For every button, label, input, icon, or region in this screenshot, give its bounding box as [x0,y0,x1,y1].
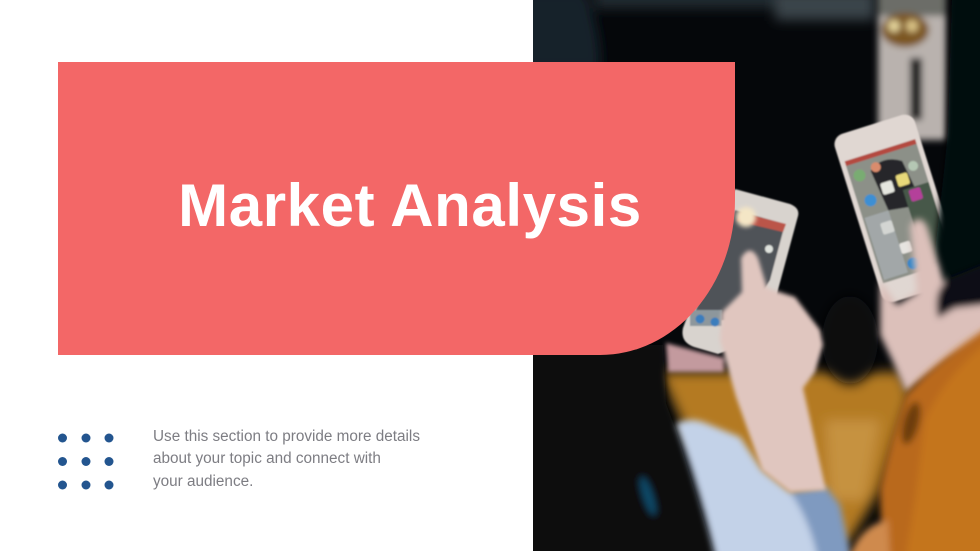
background: dark figure and top blur [520,0,875,70]
text block: description: your audience. [153,473,253,490]
photo: people using smartphones [533,0,980,551]
background: dark blob above floor [822,296,878,384]
text block: description [153,428,420,490]
icon: dot grid [58,434,114,490]
dark hair on the left [520,345,716,551]
text block: description: about your topic and connect with [153,450,381,467]
denim sleeve [676,420,852,551]
title: Market Analysis [178,172,642,239]
hand: centre hand and forearm [666,250,826,492]
dark hair over right phone [934,0,980,330]
background: wooden floor [660,372,910,551]
text block: description: Use this section to provide more details [153,428,420,445]
icon: left phone [682,189,798,354]
panel: coral title block with curved corner [58,62,735,355]
orange foreground figure [848,326,980,551]
hand: right hand and fingers [880,219,980,392]
background: pale pillar and brass fitting [878,0,946,140]
icon: right phone [832,112,965,305]
